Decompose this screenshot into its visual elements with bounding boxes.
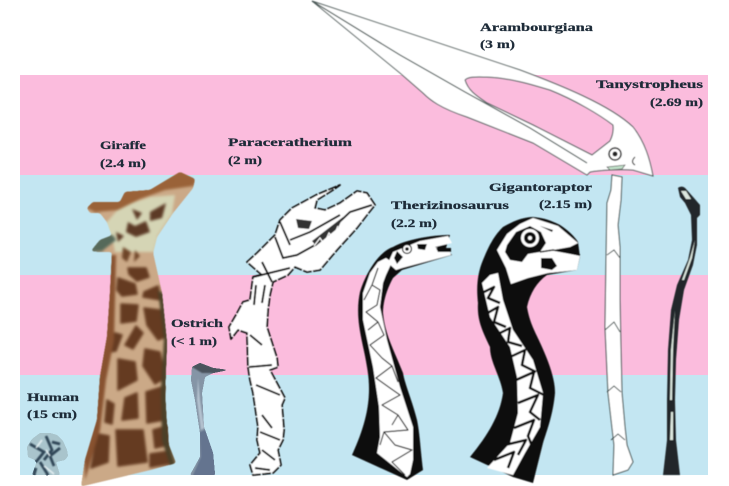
scale bands: alternating pink and blue bbox=[20, 75, 708, 475]
label: Paraceratherium: (2 m) bbox=[228, 155, 262, 167]
label: Gigantoraptor: Gigantoraptor bbox=[489, 182, 592, 194]
label: Arambourgiana bbox=[480, 22, 593, 51]
label: Gigantoraptor: (2.15 m) bbox=[539, 199, 592, 211]
label: Giraffe bbox=[100, 140, 146, 170]
illustration: Arambourgiana neck bbox=[605, 175, 633, 475]
label: Therizinosaurus bbox=[391, 200, 510, 230]
label: Gigantoraptor bbox=[489, 182, 592, 211]
label: Paraceratherium bbox=[228, 137, 353, 167]
label: Therizinosaurus: Therizinosaurus bbox=[391, 200, 510, 212]
label: Ostrich: (< 1 m) bbox=[171, 336, 217, 348]
label: Human: Human bbox=[27, 392, 80, 404]
illustration: Therizinosaurus neck bbox=[352, 235, 452, 480]
label: Arambourgiana: Arambourgiana bbox=[480, 22, 593, 34]
label: Human bbox=[27, 392, 80, 421]
label: Therizinosaurus: (2.2 m) bbox=[391, 218, 437, 230]
label: Ostrich: Ostrich bbox=[171, 318, 224, 330]
label: Ostrich bbox=[171, 318, 224, 348]
illustration: Gigantoraptor neck bbox=[470, 217, 580, 483]
label: Tanystropheus bbox=[596, 79, 704, 109]
label: Paraceratherium: Paraceratherium bbox=[228, 137, 353, 149]
illustration: giraffe bbox=[81, 172, 195, 486]
illustration: Arambourgiana skull bbox=[312, 1, 653, 176]
label: Tanystropheus: (2.69 m) bbox=[650, 97, 703, 109]
label: Tanystropheus: Tanystropheus bbox=[596, 79, 704, 91]
label: Arambourgiana: (3 m) bbox=[480, 39, 515, 51]
illustration: Tanystropheus neck bbox=[663, 187, 700, 475]
illustration: ostrich bbox=[190, 363, 228, 475]
label: Giraffe: (2.4 m) bbox=[100, 158, 146, 170]
label: Human: (15 cm) bbox=[27, 409, 77, 421]
illustration: human head bbox=[27, 433, 68, 475]
illustration: Paraceratherium skeleton bbox=[229, 185, 375, 475]
label: Giraffe: Giraffe bbox=[100, 140, 146, 152]
